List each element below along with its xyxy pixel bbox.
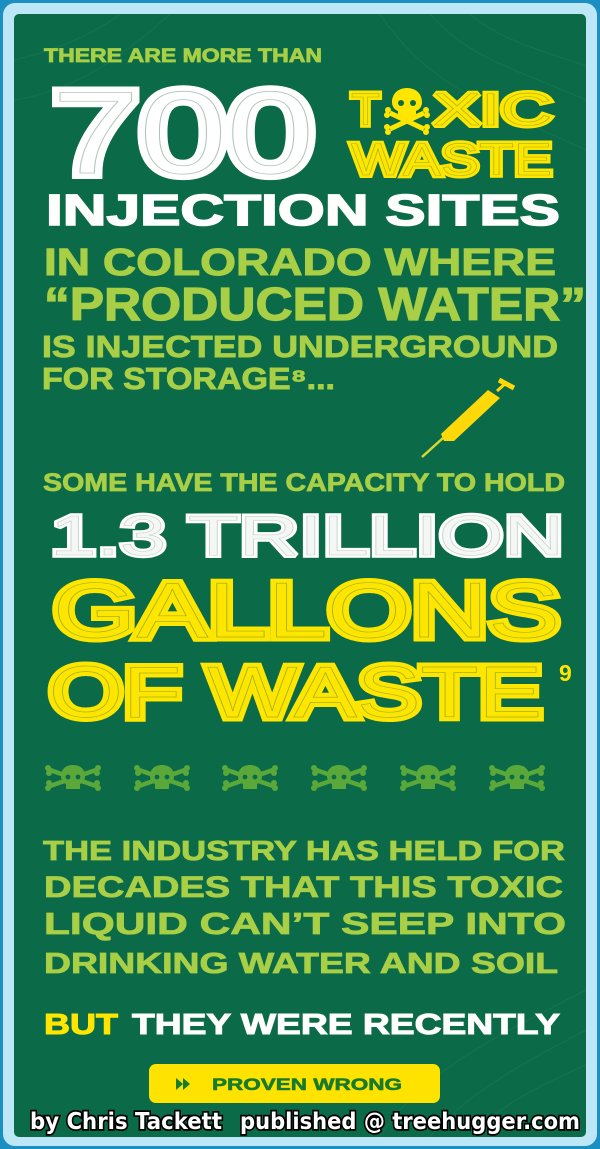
number: 700: 700 bbox=[52, 67, 314, 198]
heading: toxic: XIC bbox=[433, 84, 552, 135]
text block: in colorado: FOR STORAGE⁸... bbox=[42, 361, 335, 396]
credit line bbox=[30, 1109, 580, 1135]
heading: toxic: XIC bbox=[433, 84, 552, 135]
icon: fast forward bbox=[176, 1078, 190, 1090]
heading: gallons: GALLONS bbox=[53, 566, 560, 654]
number: 1.3 trillion: 1.3 TRILLION bbox=[50, 504, 564, 568]
text block: in colorado bbox=[42, 242, 586, 396]
number: 700: 700 bbox=[52, 67, 314, 198]
text block: the industry: LIQUID CAN’T SEEP INTO bbox=[44, 906, 566, 941]
heading: gallons: GALLONS bbox=[53, 566, 560, 654]
heading: of waste: 9 bbox=[559, 660, 572, 686]
text: but they were recently bbox=[44, 1009, 560, 1041]
heading: of waste: OF WASTE bbox=[49, 653, 542, 733]
heading: of waste: OF WASTE bbox=[49, 653, 542, 733]
heading: there are more than: THERE ARE MORE THAN bbox=[44, 46, 322, 67]
text block: in colorado: IN COLORADO WHERE bbox=[44, 242, 556, 284]
heading: toxic bbox=[351, 84, 552, 135]
credit line: by Chris Tackett bbox=[30, 1109, 222, 1135]
text block: the industry: DECADES THAT THIS TOXIC bbox=[44, 871, 563, 904]
number: 1.3 trillion: 1.3 TRILLION bbox=[50, 504, 564, 568]
text block: the industry: THE INDUSTRY HAS HELD FOR bbox=[43, 835, 565, 866]
icon row: skulls bbox=[45, 765, 545, 791]
button: proven wrong: PROVEN WRONG bbox=[212, 1075, 402, 1094]
text block: in colorado: IS INJECTED UNDERGROUND bbox=[42, 329, 558, 364]
text block: the industry bbox=[43, 835, 566, 980]
heading: toxic: T bbox=[351, 84, 380, 135]
icon: syringe bbox=[422, 380, 514, 457]
heading: waste: WASTE bbox=[351, 134, 552, 185]
text: capacity: SOME HAVE THE CAPACITY TO HOLD bbox=[43, 469, 565, 497]
text block: in colorado: “PRODUCED WATER” bbox=[44, 278, 586, 330]
button: proven wrong bbox=[149, 1064, 440, 1103]
heading: toxic: T bbox=[351, 84, 380, 135]
text: but they were recently: THEY WERE RECENTLY bbox=[132, 1009, 560, 1041]
heading: injection sites: INJECTION SITES bbox=[46, 186, 560, 235]
text: but they were recently: BUT bbox=[44, 1009, 118, 1041]
text block: the industry: DRINKING WATER AND SOIL bbox=[44, 948, 558, 980]
icon: skull and crossbones bbox=[384, 88, 430, 135]
number: 1.3 trillion bbox=[50, 504, 564, 568]
heading: waste: WASTE bbox=[351, 134, 552, 185]
